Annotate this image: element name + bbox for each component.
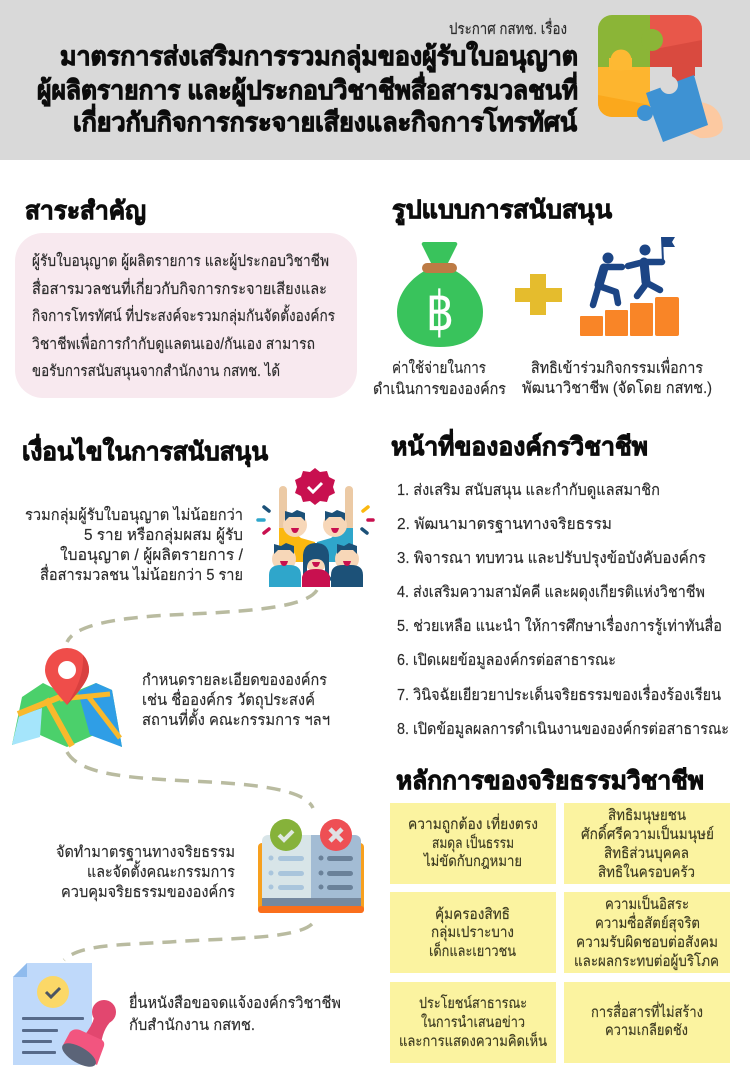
- icon: money bag: [397, 242, 483, 347]
- principle box 5: และการแสดงความคิดเห็น: [399, 1031, 547, 1050]
- title: เกี่ยวกับกิจการกระจายเสียงและกิจการโทรทัศน์: [73, 103, 577, 137]
- principle box 1: ไม่ขัดกับกฎหมาย: [423, 852, 522, 870]
- principle box 5: ประโยชน์สาธารณะ: [419, 994, 527, 1012]
- panel: key points: ผู้รับใบอนุญาต ผู้ผลิตรายการ และผู้ประกอบวิชาชีพ: [32, 252, 329, 271]
- icon: climbers on steps: [580, 237, 679, 336]
- step 2 text: สถานที่ตั้ง คณะกรรมการ ฯลฯ: [142, 708, 330, 729]
- heading: ethics principles: หลักการของจริยธรรมวิชาชีพ: [396, 767, 704, 795]
- step 3 text: [56, 844, 235, 902]
- icon: puzzle: [598, 15, 723, 142]
- principle box 2: สิทธิมนุษยชน: [608, 807, 686, 825]
- caption: expenses: ดำเนินการขององค์กร: [373, 380, 506, 398]
- principle box 3: กลุ่มเปราะบาง: [431, 924, 514, 942]
- step 3 text: ควบคุมจริยธรรมขององค์กร: [61, 883, 235, 902]
- step 1 text: รวมกลุ่มผู้รับใบอนุญาต ไม่น้อยกว่า: [25, 506, 243, 525]
- duties list: 8. เปิดข้อมูลผลการดำเนินงานขององค์กรต่อสาธารณะ: [397, 720, 729, 739]
- caption: expenses: ค่าใช้จ่ายในการ: [392, 359, 486, 377]
- step 1 text: [25, 506, 244, 584]
- caption: activity rights: พัฒนาวิชาชีพ (จัดโดย กสทช.): [522, 379, 712, 397]
- step 1 text: สื่อสารมวลชน ไม่น้อยกว่า 5 ราย: [40, 564, 243, 584]
- icon: group of people: [258, 468, 373, 587]
- principle box 2: ศักดิ์ศรีความเป็นมนุษย์: [581, 823, 714, 844]
- principle box 1: [390, 803, 556, 884]
- step 2 text: กำหนดรายละเอียดขององค์กร: [142, 671, 327, 689]
- panel: key points: สื่อสารมวลชนที่เกี่ยวกับกิจการกระจายเสียงและ: [32, 278, 327, 298]
- path arrow 3: [64, 924, 312, 960]
- caption: activity rights: [522, 357, 712, 397]
- baht glyph: ฿: [426, 280, 454, 343]
- duties list: 7. วินิจฉัยเยียวยาประเด็นจริยธรรมของเรื่องร้องเรียน: [397, 684, 721, 704]
- heading: key points: สาระสำคัญ: [25, 197, 146, 225]
- duties list: 6. เปิดเผยข้อมูลองค์กรต่อสาธารณะ: [397, 651, 616, 670]
- principle box 4: [564, 892, 730, 973]
- icon: open book: [258, 819, 364, 913]
- principle box 4: และผลกระทบต่อผู้บริโภค: [574, 952, 719, 970]
- title: [37, 41, 578, 137]
- step 3 text: และจัดตั้งคณะกรรมการ: [87, 860, 235, 881]
- step 4 text: ยื่นหนังสือขอจดแจ้งองค์กรวิชาชีพ: [129, 992, 341, 1012]
- duties list: 3. พิจารณา ทบทวน และปรับปรุงข้อบังคับองค์กร: [397, 549, 706, 568]
- caption: expenses: [373, 359, 506, 398]
- duties list: 4. ส่งเสริมความสามัคคี และผดุงเกียรติแห่งวิชาชีพ: [397, 584, 705, 602]
- step 1 text: 5 ราย หรือกลุ่มผสม ผู้รับ: [84, 526, 243, 545]
- principle box 2: [564, 803, 730, 884]
- heading: support types: รูปแบบการสนับสนุน: [392, 196, 612, 226]
- step 1 text: ใบอนุญาต / ผู้ผลิตรายการ /: [60, 546, 244, 565]
- principle box 3: เด็กและเยาวชน: [429, 941, 516, 960]
- panel: key points: วิชาชีพเพื่อการกำกับดูแลตนเอง/กันเอง สามารถ: [32, 333, 315, 354]
- path arrow 2: [67, 752, 313, 808]
- header subtitle: ประกาศ กสทช. เรื่อง: [449, 18, 567, 38]
- duties list: 5. ช่วยเหลือ แนะนำ ให้การศึกษาเรื่องการรู้เท่าทันสื่อ: [397, 615, 722, 636]
- title: ผู้ผลิตรายการ และผู้ประกอบวิชาชีพสื่อสารมวลชนที่: [37, 71, 578, 107]
- duties list: 2. พัฒนามาตรฐานทางจริยธรรม: [397, 516, 612, 533]
- principle box 5: ในการนำเสนอข่าว: [421, 1013, 525, 1031]
- heading: duties: หน้าที่ขององค์กรวิชาชีพ: [391, 429, 648, 461]
- duties list: [397, 482, 729, 739]
- heading: conditions: เงื่อนไขในการสนับสนุน: [22, 434, 268, 468]
- step 2 text: เช่น ชื่อองค์กร วัตถุประสงค์: [142, 689, 315, 710]
- principle box 6: ความเกลียดชัง: [605, 1022, 688, 1039]
- icon: document and stamp: [13, 963, 116, 1071]
- principle box 6: การสื่อสารที่ไม่สร้าง: [591, 1001, 703, 1021]
- principle box 4: ความรับผิดชอบต่อสังคม: [576, 934, 718, 951]
- duties list: 1. ส่งเสริม สนับสนุน และกำกับดูแลสมาชิก: [397, 482, 660, 500]
- principle box 4: ความเป็นอิสระ: [605, 894, 689, 913]
- title: มาตรการส่งเสริมการรวมกลุ่มของผู้รับใบอนุญาต: [60, 41, 578, 73]
- path arrow 1: [67, 590, 317, 642]
- panel: key points: กิจการโทรทัศน์ ที่ประสงค์จะรวมกลุ่มกันจัดตั้งองค์กร: [32, 304, 335, 326]
- principle box 4: ความซื่อสัตย์สุจริต: [595, 912, 700, 933]
- principle box 1: ความถูกต้อง เที่ยงตรง: [408, 813, 538, 833]
- panel: key points: ขอรับการสนับสนุนจากสำนักงาน กสทช. ได้: [32, 362, 280, 381]
- caption: activity rights: สิทธิเข้าร่วมกิจกรรมเพื่อการ: [531, 357, 703, 377]
- step 4 text: [129, 992, 341, 1034]
- principle box 2: สิทธิส่วนบุคคล: [604, 845, 689, 863]
- principle box 2: สิทธิในครอบครัว: [598, 863, 695, 881]
- panel: key points: [15, 233, 357, 398]
- icon: map with pin: [12, 648, 122, 747]
- principle box 6: [564, 982, 730, 1063]
- step 2 text: [142, 671, 330, 729]
- principle box 1: สมดุล เป็นธรรม: [432, 833, 514, 853]
- step 3 text: จัดทำมาตรฐานทางจริยธรรม: [56, 844, 235, 861]
- step 4 text: กับสำนักงาน กสทช.: [129, 1017, 255, 1034]
- principle box 5: [390, 982, 556, 1063]
- principle box 3: [390, 892, 556, 973]
- principle box 3: คุ้มครองสิทธิ: [435, 906, 510, 924]
- icon: plus: [515, 274, 562, 315]
- header band: [0, 0, 750, 160]
